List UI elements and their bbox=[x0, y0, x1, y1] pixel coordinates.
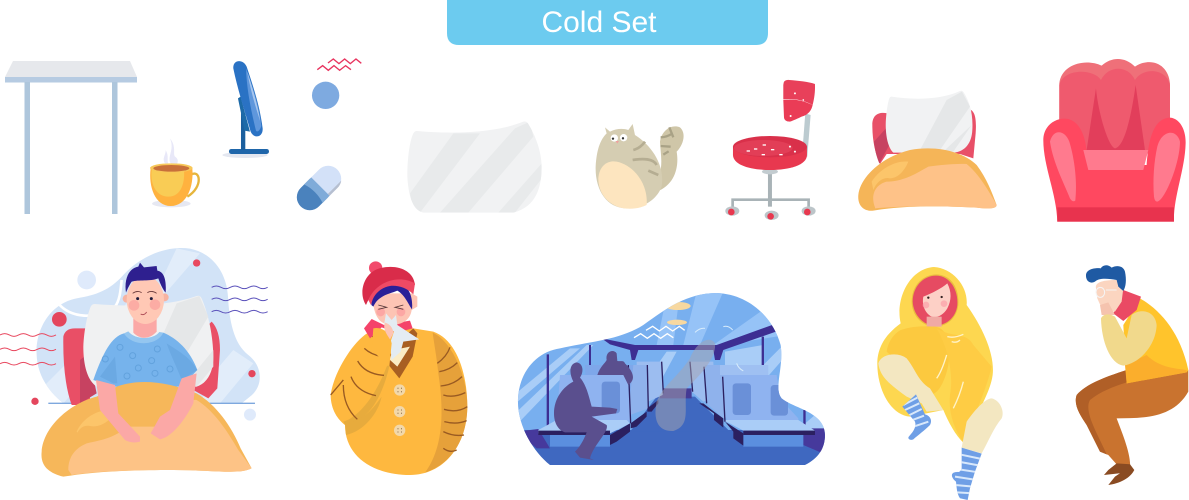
scarf bbox=[364, 319, 413, 338]
scene: sick man in bed bbox=[0, 248, 268, 477]
left seats bbox=[637, 362, 663, 402]
hands and arm bbox=[1100, 302, 1115, 315]
sleeve lines bbox=[331, 336, 467, 451]
ceiling lamps and zigzags bbox=[665, 302, 691, 310]
hair bbox=[913, 276, 957, 326]
trousers bbox=[1076, 370, 1188, 470]
office chair bbox=[725, 80, 816, 220]
face bbox=[373, 293, 417, 325]
scene: man with scarf sitting bbox=[1076, 265, 1188, 485]
blanket bbox=[41, 382, 252, 477]
background blob bbox=[37, 248, 260, 403]
hair bbox=[371, 283, 412, 309]
buttons bbox=[394, 384, 405, 436]
arms bbox=[96, 380, 140, 443]
hair bbox=[1086, 265, 1126, 291]
floor bbox=[524, 430, 825, 465]
window background bbox=[518, 293, 825, 438]
scene: girl in yellow blanket bbox=[877, 267, 1003, 500]
man torso bbox=[93, 333, 197, 387]
title banner bbox=[447, 0, 768, 45]
cat bbox=[596, 124, 684, 209]
floor line bbox=[48, 401, 255, 405]
dots bbox=[31, 259, 256, 421]
tissue bbox=[384, 313, 419, 360]
scene: bus interior bbox=[518, 293, 825, 465]
head bbox=[1096, 280, 1123, 312]
headboard bbox=[63, 322, 220, 405]
scarf bbox=[1113, 290, 1141, 321]
red waves bbox=[0, 334, 56, 365]
decoration: zigzag and dot bbox=[312, 59, 361, 109]
legs bbox=[878, 354, 943, 412]
icon: standing mirror bbox=[222, 61, 269, 158]
icon: pill capsule bbox=[291, 160, 347, 216]
cold air bbox=[655, 340, 715, 431]
title banner: Cold Set bbox=[541, 6, 657, 39]
socks bbox=[902, 394, 982, 500]
purple waves bbox=[212, 286, 268, 313]
right seats bbox=[690, 362, 715, 402]
pillow bbox=[83, 296, 213, 387]
shoes bbox=[1104, 463, 1134, 485]
hat bbox=[369, 261, 382, 275]
icon: coffee cup bbox=[150, 138, 199, 207]
sweater body bbox=[331, 328, 467, 475]
passengers bbox=[597, 351, 633, 385]
face bbox=[923, 283, 951, 317]
pillow bbox=[407, 122, 543, 213]
man head bbox=[123, 263, 169, 324]
blanket folds bbox=[887, 326, 949, 394]
collar bbox=[387, 328, 417, 378]
scene: person sneezing bbox=[331, 261, 467, 475]
table bbox=[5, 61, 137, 214]
bed set: pillow and blanket bbox=[858, 91, 997, 211]
roof frame bbox=[602, 323, 781, 360]
blanket back bbox=[877, 267, 993, 443]
armchair bbox=[1043, 59, 1186, 222]
vest bbox=[1123, 298, 1188, 383]
birds bbox=[695, 326, 743, 371]
